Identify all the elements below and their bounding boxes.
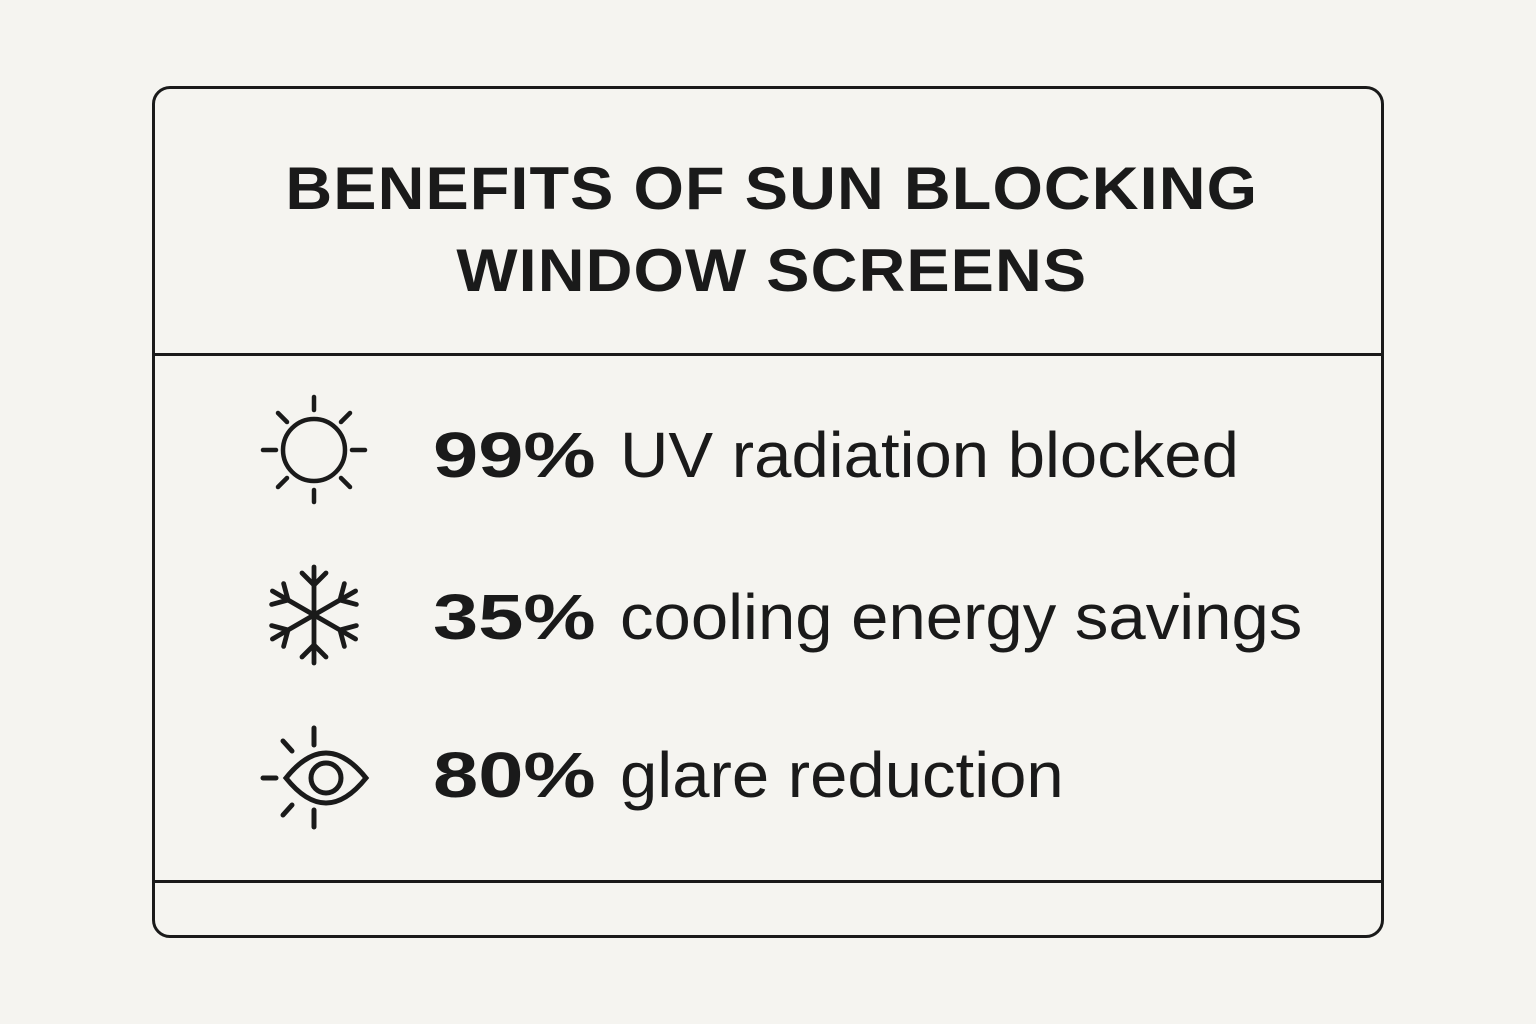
icon: snowflake [269, 564, 359, 666]
title [285, 155, 1258, 304]
row 1 text: UV radiation blocked [620, 419, 1239, 491]
row 1 text: 99% [433, 419, 596, 491]
icon: eye [260, 726, 370, 830]
row 3 text: glare reduction [620, 739, 1064, 811]
row 3 text: 80% [433, 739, 596, 811]
title: BENEFITS OF SUN BLOCKING [285, 155, 1258, 222]
frame panel [152, 86, 1384, 938]
row 2 text: cooling energy savings [620, 581, 1302, 653]
icon: sun [260, 394, 368, 504]
row 2 text: 35% [433, 581, 596, 653]
title: WINDOW SCREENS [456, 237, 1087, 304]
